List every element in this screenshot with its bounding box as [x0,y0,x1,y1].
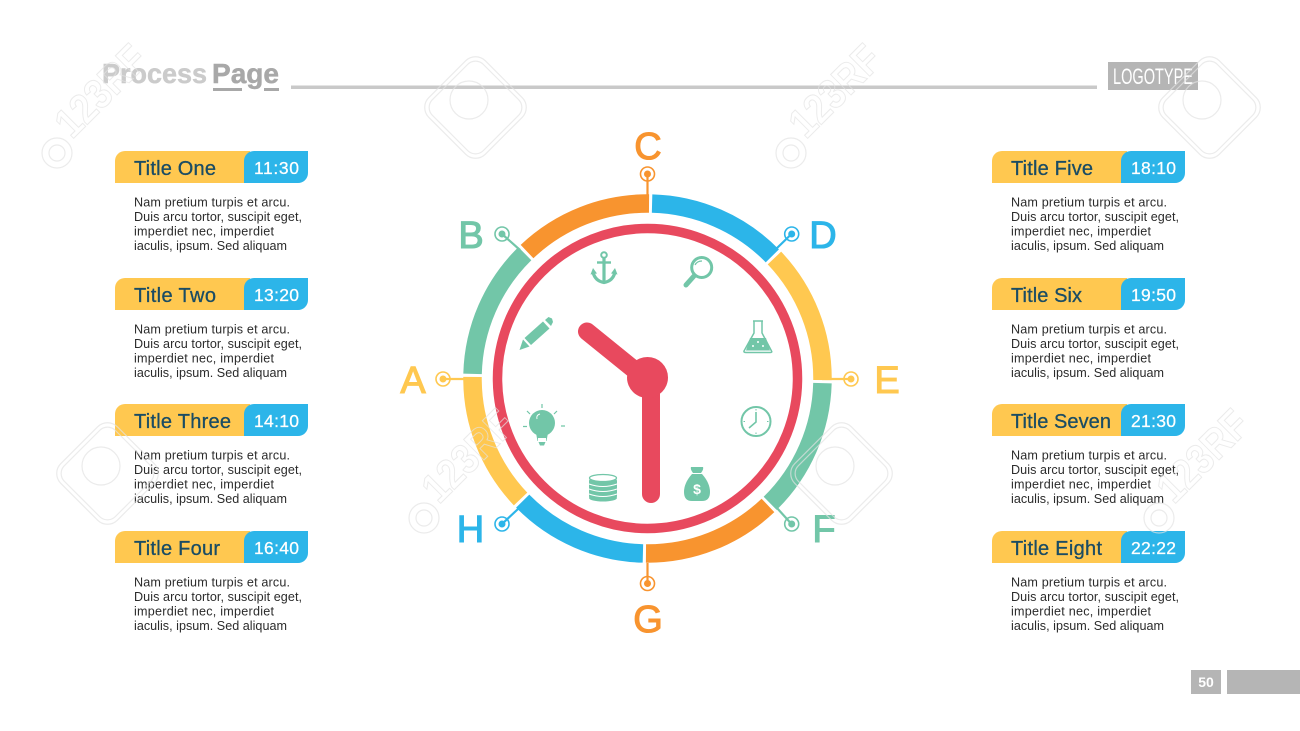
icon: clock [742,407,770,436]
marker G [640,563,654,590]
panel: title one: imperdiet nec, imperdiet [134,224,274,238]
watermarks: 123RF [779,35,890,146]
panel: title seven: Duis arcu tortor, suscipit eget, [1011,463,1179,477]
icon: magnifier [686,258,712,285]
icon: light bulb [523,404,565,446]
icon: money bag: $ [693,481,701,497]
panel: title five [992,151,1185,253]
panel: title two: 13:20 [254,285,299,305]
icon: anchor [590,252,618,282]
panel: title seven: iaculis, ipsum. Sed aliquam [1011,492,1164,506]
panel: title seven: imperdiet nec, imperdiet [1011,478,1152,492]
panel: title three [115,404,308,506]
marker C [640,167,654,195]
panel: title six: Title Six [1011,285,1082,307]
panel: title four: iaculis, ipsum. Sed aliquam [134,619,287,633]
panel: title two: Title Two [134,285,216,307]
icon: coin stack [589,474,617,502]
panel: title two [115,278,308,380]
letter D: D [809,215,837,257]
panel: title six [992,278,1185,380]
panel: title one: Nam pretium turpis et arcu. [134,196,290,210]
panel: title five: imperdiet nec, imperdiet [1011,224,1152,238]
title [102,58,279,91]
panel: title three: iaculis, ipsum. Sed aliquam [134,492,287,506]
page number: 50 [1198,674,1214,690]
watermarks: 123RF [412,400,523,511]
panel: title six: Nam pretium turpis et arcu. [1011,322,1167,336]
panel: title seven [992,404,1185,506]
panel: title one [115,151,308,253]
panel: title three: imperdiet nec, imperdiet [134,478,274,492]
marker B [495,227,520,250]
panel: title three: 14:10 [254,411,299,431]
letter E: E [874,360,900,402]
clock diagram [400,126,900,641]
panel: title two: iaculis, ipsum. Sed aliquam [134,366,287,380]
panel: title three: Duis arcu tortor, suscipit eget, [134,463,302,477]
panel: title six: Duis arcu tortor, suscipit eget, [1011,337,1179,351]
panel: title two: Nam pretium turpis et arcu. [134,322,290,336]
panel: title four: Duis arcu tortor, suscipit eget, [134,590,302,604]
panel: title seven: 21:30 [1131,411,1176,431]
panel: title one: iaculis, ipsum. Sed aliquam [134,239,287,253]
watermarks: 123RF [1147,400,1258,511]
letter C: C [634,126,662,168]
panel: title seven: Title Seven [1011,411,1111,433]
panel: title three: Title Three [134,411,231,433]
panel: title eight: Title Eight [1011,538,1102,560]
title: Process [102,58,207,89]
panel: title eight: Nam pretium turpis et arcu. [1011,576,1167,590]
clock hands [587,332,668,494]
panel: title five: Duis arcu tortor, suscipit eget, [1011,210,1179,224]
panel: title eight: 22:22 [1131,538,1176,558]
watermarks: 123RF [45,35,156,146]
logotype [1108,62,1198,90]
panel: title eight: iaculis, ipsum. Sed aliquam [1011,619,1164,633]
panel: title four: imperdiet nec, imperdiet [134,604,274,618]
panel: title eight: Duis arcu tortor, suscipit eget, [1011,590,1179,604]
marker F [777,508,799,531]
page number [1191,670,1221,694]
panel: title eight [992,531,1185,633]
footer bar [1227,670,1300,694]
panel: title six: 19:50 [1131,285,1176,305]
letter F: F [812,509,836,551]
panel: title five: 18:10 [1131,158,1176,178]
letter B: B [458,215,484,257]
letter A: A [400,360,426,402]
marker H [495,509,518,531]
panel: title four: 16:40 [254,538,299,558]
title: Page [212,58,279,89]
icon: money bag [684,467,710,501]
panel: title four: Nam pretium turpis et arcu. [134,576,290,590]
outer ring segments [473,204,822,553]
panel: title eight: imperdiet nec, imperdiet [1011,604,1152,618]
letter G: G [633,599,663,641]
panel: title one: Duis arcu tortor, suscipit eget, [134,210,302,224]
panel: title seven: Nam pretium turpis et arcu. [1011,448,1167,462]
panel: title six: imperdiet nec, imperdiet [1011,352,1152,366]
panel: title five: iaculis, ipsum. Sed aliquam [1011,239,1164,253]
panel: title six: iaculis, ipsum. Sed aliquam [1011,366,1164,380]
marker A [436,372,464,386]
panel: title four: Title Four [134,538,220,560]
logotype: LOGOTYPE [1113,64,1193,89]
marker D [776,227,799,249]
icon: flask [744,321,772,352]
panel: title five: Title Five [1011,158,1093,180]
inner red ring [498,228,798,528]
watermarks [42,35,1266,533]
panel: title four [115,531,308,633]
icon: pencil [520,317,553,350]
letter H: H [457,509,484,551]
marker E [822,372,858,386]
panel: title two: Duis arcu tortor, suscipit eget, [134,337,302,351]
panel: title two: imperdiet nec, imperdiet [134,352,274,366]
panel: title three: Nam pretium turpis et arcu. [134,448,290,462]
panel: title five: Nam pretium turpis et arcu. [1011,196,1167,210]
panel: title one: 11:30 [254,158,299,178]
panel: title one: Title One [134,158,216,180]
